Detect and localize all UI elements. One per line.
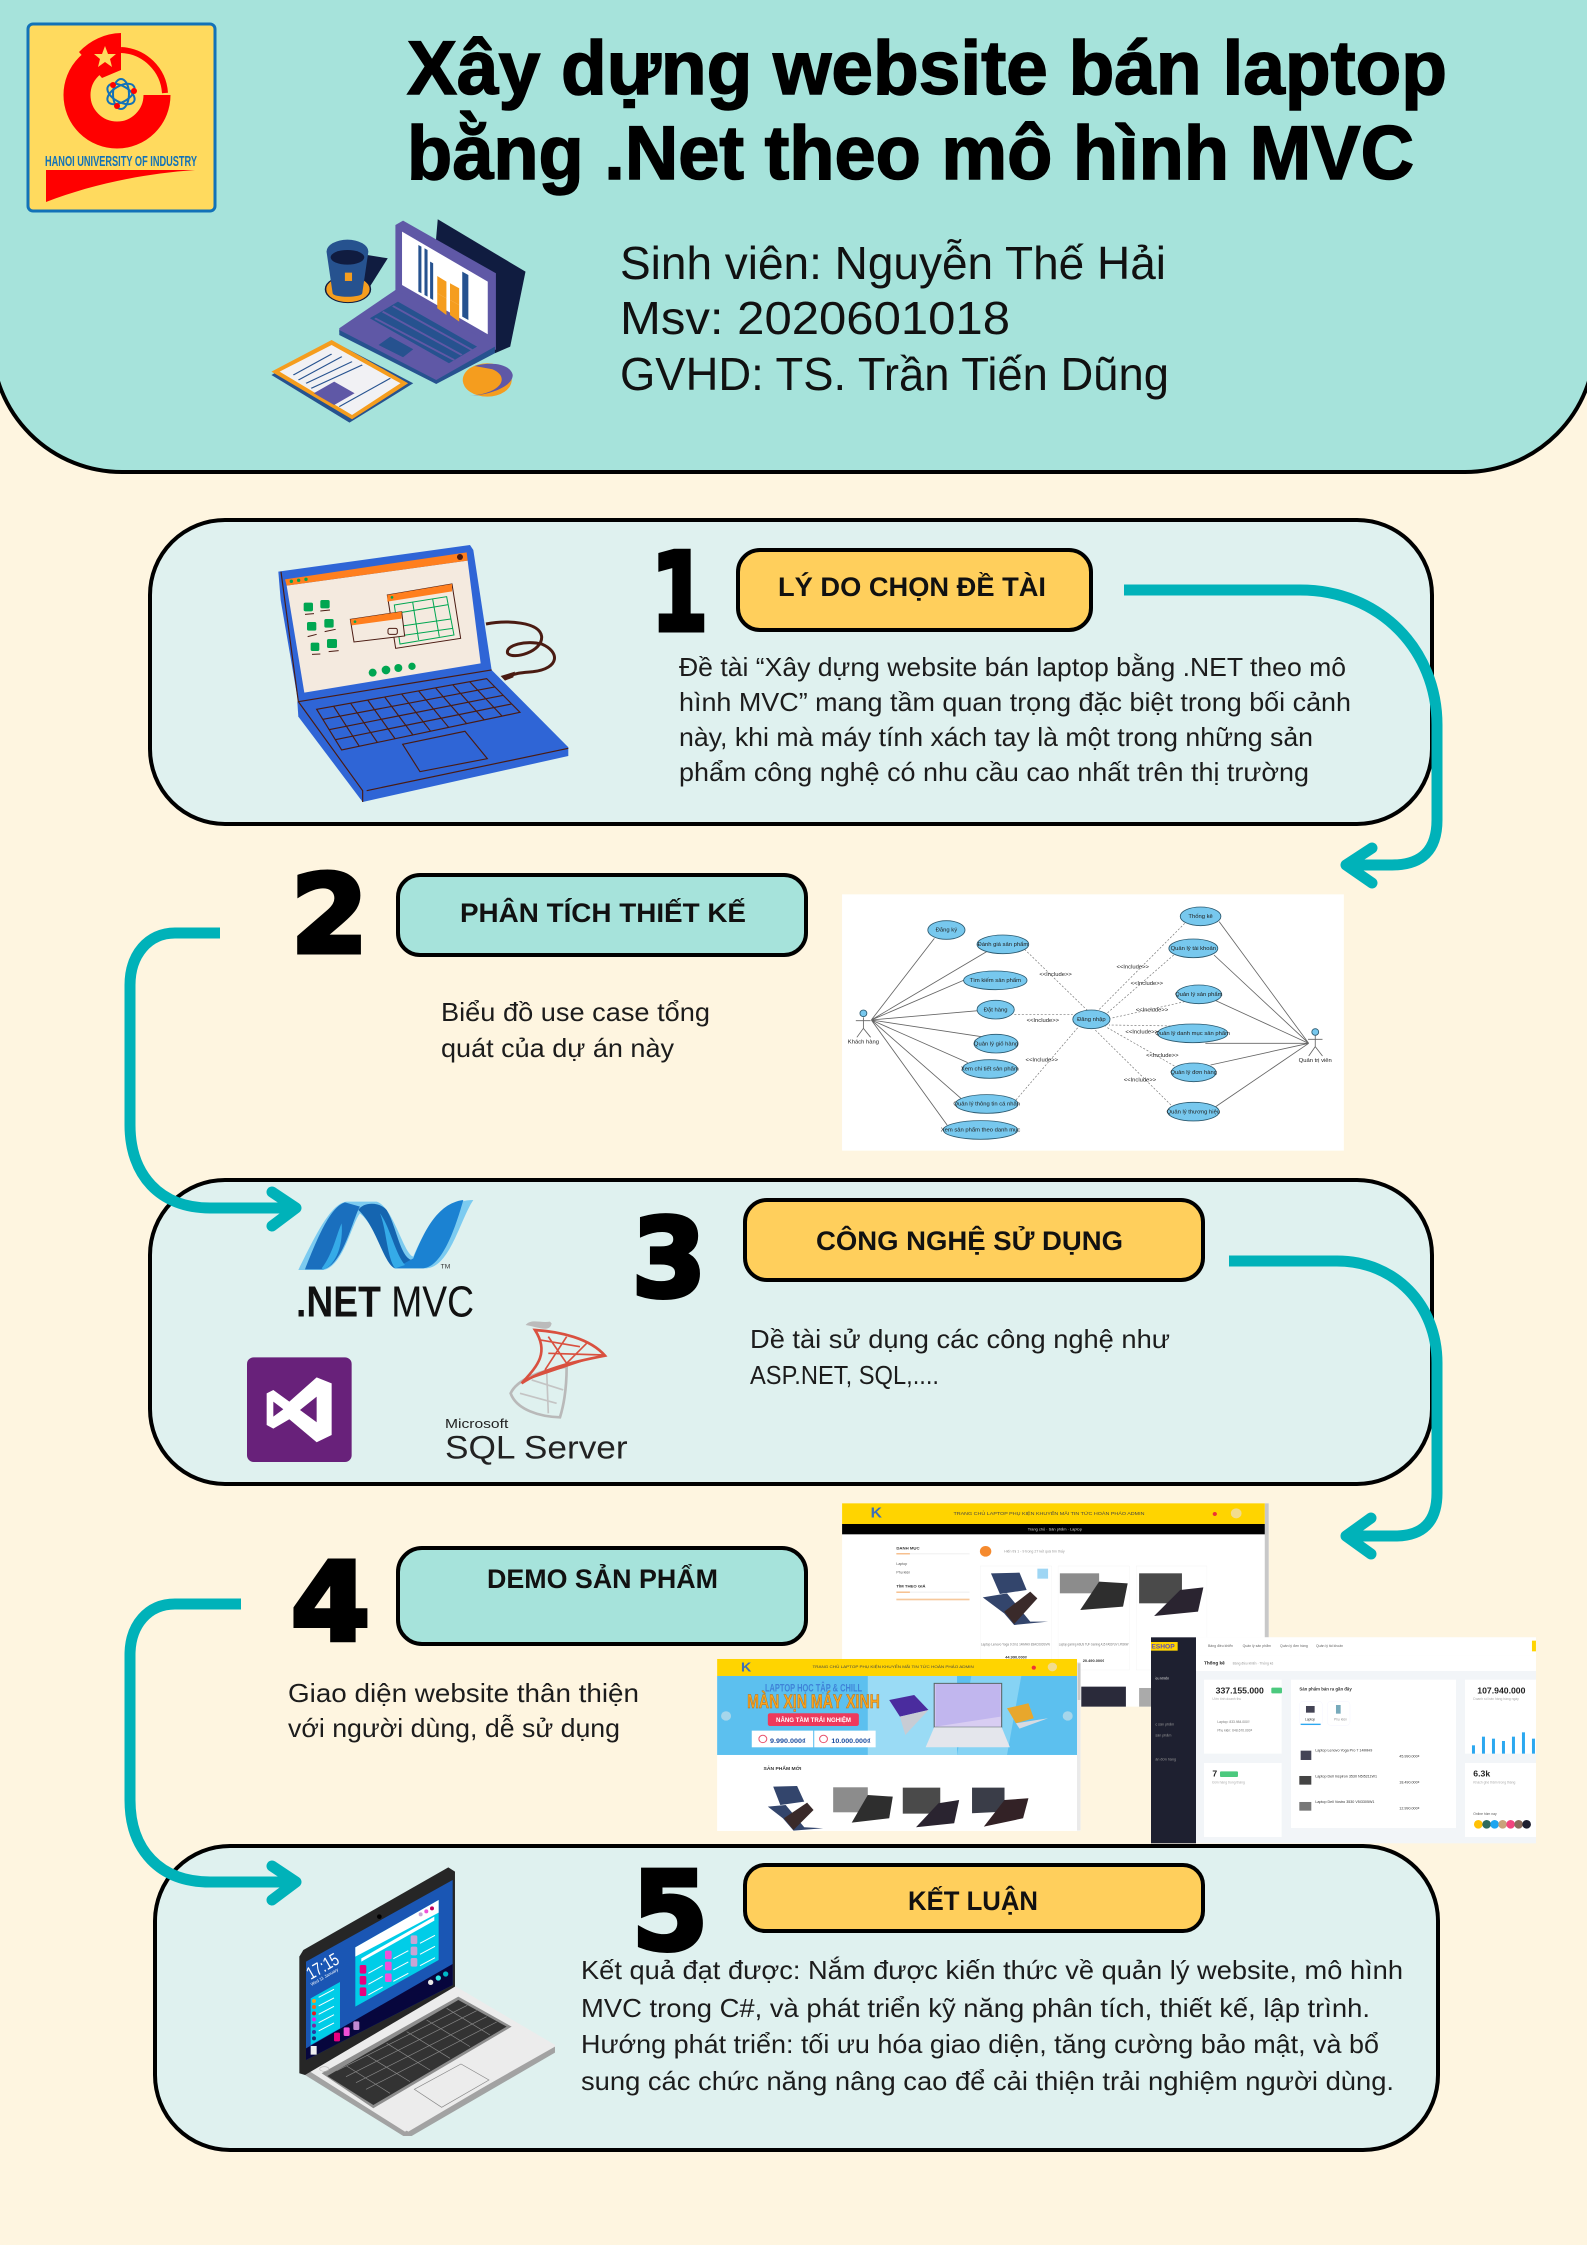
- screenshot: admin dashboard: Ước tính doanh thu: [1212, 1697, 1241, 1701]
- screenshot: admin dashboard: Phụ kiện: [1334, 1718, 1347, 1722]
- text: step 5 conclusion: Kết quả đạt được: Nắm được kiến thức về quản lý website, mô hình: [581, 1955, 1403, 1985]
- screenshot: product listing page: K: [871, 1505, 882, 1521]
- text: step 1 description: [679, 652, 1351, 787]
- screenshot: admin dashboard: [1151, 1637, 1536, 1843]
- chart: use case diagram: <<Include>>: [1026, 1058, 1059, 1064]
- screenshot: admin dashboard: 45.990.000₫: [1399, 1754, 1420, 1758]
- screenshot: admin dashboard: ESHOP: [1151, 1644, 1175, 1651]
- screenshot: product listing page: DANH MỤC: [896, 1546, 920, 1551]
- chart: use case diagram: Xem sản phẩm theo danh mục: [941, 1127, 1020, 1134]
- text: step 1 description: Đề tài “Xây dựng website bán laptop bằng .NET theo mô: [679, 652, 1346, 682]
- icon: isometric laptop, cup, tablet and mouse: [271, 219, 526, 423]
- text: step 2 description: [441, 997, 710, 1063]
- screenshot: homepage with banner: MÀN XỊN MÁY XINH: [747, 1691, 880, 1713]
- screenshot: homepage with banner: SẢN PHẨM MỚI: [764, 1764, 802, 1772]
- screenshot: product listing page: Laptop Lenovo Yoga 9 2in1 14IMH9 83AC000SVN: [981, 1643, 1050, 1647]
- badge: demo sản phẩm: [398, 1548, 806, 1644]
- panel: step 3 background: [150, 1180, 1432, 1484]
- text: step 5 conclusion: [581, 1955, 1403, 2096]
- chart: use case diagram: Thống kê: [1188, 914, 1213, 920]
- chart: use case diagram: Quản lý tài khoản: [1171, 946, 1216, 952]
- screenshot: homepage with banner: TRANG CHỦ LAPTOP PHỤ KIỆN KHUYẾN MÃI TIN TỨC HOÀN PHÁO ADMIN: [812, 1664, 974, 1669]
- icon: .NET MVC logo: TM: [441, 1264, 450, 1271]
- number 4: 4: [291, 1541, 370, 1666]
- icon: Visual Studio logo: [247, 1357, 352, 1462]
- screenshot: admin dashboard: Bảng điều khiển: [1208, 1644, 1233, 1648]
- icon: silver laptop with dashboard screen: 17:15: [303, 1950, 343, 1984]
- text: step 5 conclusion: sung các chức năng nâng cao để cải thiện trải nghiệm người dùng.: [581, 2066, 1394, 2096]
- chart: use case diagram: <<Include>>: [1146, 1053, 1179, 1059]
- chart: use case diagram: Khách hàng: [848, 1039, 879, 1045]
- screenshot: admin dashboard: Laptop: 833.984.000₫: [1217, 1720, 1250, 1724]
- chart: use case diagram: Đánh giá sản phẩm: [978, 941, 1028, 948]
- title: Xây dựng website bán laptop: [407, 26, 1447, 111]
- screenshot: admin dashboard: 107.940.000: [1477, 1685, 1526, 1695]
- screenshot: admin dashboard: Online hôm nay: [1473, 1812, 1497, 1816]
- text: step 3 description: [750, 1324, 1170, 1390]
- icon: Microsoft SQL Server logo: Microsoft: [445, 1416, 509, 1431]
- screenshot: admin dashboard: Laptop Dell Vostro 3530 V5I3305W1: [1315, 1800, 1374, 1804]
- icon: .NET MVC logo: .NET MVC: [296, 1279, 474, 1327]
- chart: use case diagram: Đăng ký: [936, 928, 957, 934]
- screenshot: product listing page: Laptop: [896, 1562, 907, 1566]
- student information: Msv: 2020601018: [620, 292, 1010, 344]
- badge: lý do chọn đề tài: LÝ DO CHỌN ĐỀ TÀI: [778, 571, 1046, 602]
- screenshot: admin dashboard: sản phẩm: [1155, 1734, 1171, 1738]
- screenshot: homepage with banner: [717, 1659, 1081, 1831]
- chart: use case diagram: Tìm kiếm sản phẩm: [970, 977, 1021, 984]
- screenshot: admin dashboard: 337.155.000: [1216, 1685, 1264, 1695]
- chart: use case diagram: Quản lý thương hiệu: [1167, 1109, 1220, 1115]
- text: step 2 description: Biểu đồ use case tổng: [441, 997, 710, 1027]
- screenshot: product listing page: 20.490.000₫: [1083, 1659, 1104, 1663]
- screenshot: admin dashboard: Quản lý đơn hàng: [1280, 1644, 1308, 1648]
- screenshot: homepage with banner: K: [741, 1659, 751, 1675]
- badge: kết luận: [745, 1865, 1203, 1931]
- screenshot: homepage with banner: LAPTOP HỌC TẬP & CHILL: [765, 1682, 862, 1694]
- screenshot: admin dashboard: Đơn hàng trong tháng: [1212, 1781, 1245, 1785]
- screenshot: admin dashboard: Phụ kiện: 648.670.000₫: [1217, 1729, 1253, 1733]
- chart: use case diagram: Quản lý đơn hàng: [1170, 1070, 1217, 1076]
- text: step 1 description: hình MVC” mang tầm quan trọng đặc biệt trong bối cảnh: [679, 687, 1351, 717]
- screenshot: admin dashboard: Doanh số bán hàng hàng ngày: [1473, 1697, 1519, 1701]
- text: step 2 description: quát của dự án này: [441, 1033, 674, 1063]
- arrow: step 2 to step 3: [130, 933, 296, 1226]
- screenshot: admin dashboard: Laptop Dell Inspiron 3530 N5I5211W1: [1315, 1774, 1377, 1778]
- chart: use case diagram: <<Include>>: [1124, 1077, 1157, 1083]
- screenshot: admin dashboard: Thống kê: [1204, 1660, 1225, 1666]
- icon: Microsoft SQL Server logo: SQL Server: [445, 1429, 628, 1465]
- arrow: step 4 to step 5: [130, 1604, 296, 1900]
- title: [407, 26, 1447, 196]
- chart: use case diagram: Quản trị viên: [1299, 1058, 1332, 1064]
- number 2: 2: [291, 853, 368, 978]
- logo: Hanoi University of Industry: [28, 24, 215, 211]
- chart: use case diagram: <<Include>>: [1116, 964, 1150, 970]
- arrow: step 3 to step 4: [1229, 1261, 1437, 1554]
- badge: phân tích thiết kế: PHÂN TÍCH THIẾT KẾ: [460, 897, 746, 928]
- student information: [620, 237, 1169, 400]
- screenshot: product listing page: 44.990.000₫: [1005, 1655, 1027, 1659]
- screenshot: admin dashboard: 6.3k: [1473, 1769, 1490, 1779]
- text: step 1 description: phẩm công nghệ có nhu cầu cao nhất trên thị trường: [679, 757, 1309, 787]
- icon: silver laptop with dashboard screen: [299, 1867, 555, 2136]
- screenshot: admin dashboard: c sản phẩm: [1155, 1723, 1174, 1727]
- chart: use case diagram: <<Include>>: [1027, 1018, 1060, 1024]
- screenshot: admin dashboard: ản đơn hàng: [1155, 1758, 1176, 1762]
- student information: GVHD: TS. Trần Tiến Dũng: [620, 348, 1169, 400]
- chart: use case diagram: Đăng nhập: [1077, 1017, 1106, 1023]
- number 5: 5: [632, 1850, 708, 1975]
- screenshot: homepage with banner: NÂNG TẦM TRẢI NGHIỆM: [776, 1714, 851, 1724]
- chart: use case diagram: Quản lý thông tin cá nhân: [953, 1102, 1020, 1108]
- chart: use case diagram: <<Include>>: [1125, 1029, 1159, 1035]
- chart: use case diagram: <<Include>>: [1039, 972, 1072, 978]
- badge: kết luận: KẾT LUẬN: [908, 1885, 1038, 1916]
- badge: lý do chọn đề tài: [738, 550, 1091, 630]
- text: step 5 conclusion: Hướng phát triển: tối ưu hóa giao diện, tăng cường bảo mật, và bổ: [581, 2029, 1379, 2059]
- title: bằng .Net theo mô hình MVC: [407, 111, 1414, 196]
- screenshot: admin dashboard: Bảng điều khiển · Thống kê: [1233, 1661, 1273, 1665]
- badge: phân tích thiết kế: [398, 875, 806, 955]
- icon: blue laptop with spreadsheet: [278, 545, 568, 802]
- screenshot: product listing page: Laptop gaming ASUS TUF Gaming A15 FA507UV LP090W: [1059, 1643, 1129, 1647]
- text: step 5 conclusion: MVC trong C#, và phát triển kỹ năng phân tích, thiết kế, lập trình.: [581, 1993, 1370, 2023]
- logo: Hanoi University of Industry: HANOI UNIVERSITY OF INDUSTRY: [45, 153, 197, 170]
- chart: use case diagram: Quản lý danh mục sản phẩm: [1155, 1030, 1230, 1037]
- badge: demo sản phẩm: DEMO SẢN PHẨM: [487, 1562, 718, 1594]
- screenshot: admin dashboard: ều khiển: [1155, 1676, 1169, 1680]
- text: step 4 description: Giao diện website thân thiện: [288, 1678, 639, 1708]
- screenshot: product listing page: [842, 1503, 1269, 1707]
- chart: use case diagram: Xem chi tiết sản phẩm: [961, 1066, 1019, 1073]
- text: step 1 description: này, khi mà máy tính xách tay là một trong những sản: [679, 722, 1313, 752]
- screenshot: product listing page: Hiển thị 1 - 9 trong 27 kết quả tìm thấy: [1004, 1550, 1065, 1554]
- text: step 4 description: với người dùng, dễ sử dụng: [288, 1713, 620, 1743]
- screenshot: admin dashboard: 7: [1212, 1769, 1217, 1779]
- screenshot: product listing page: TRANG CHỦ LAPTOP PHỤ KIỆN KHUYẾN MÃI TIN TỨC HOÀN PHÁO ADMIN: [953, 1509, 1144, 1516]
- chart: use case diagram: Quản lý sản phẩm: [1175, 991, 1223, 998]
- screenshot: product listing page: TÌM THEO GIÁ: [896, 1584, 926, 1589]
- panel: step 5 background: [155, 1846, 1438, 2150]
- chart: use case diagram: <<Include>>: [1136, 1008, 1169, 1014]
- text: step 4 description: [288, 1678, 639, 1743]
- screenshot: product listing page: Phụ kiện: [896, 1570, 910, 1574]
- chart: use case diagram: Quản lý giỏ hàng: [974, 1040, 1018, 1047]
- screenshot: admin dashboard: Quản lý sản phẩm: [1243, 1644, 1271, 1648]
- number 1: 1: [651, 531, 708, 656]
- icon: silver laptop with dashboard screen: Wed 11 January: [310, 1967, 340, 1987]
- icon: Microsoft SQL Server logo: [445, 1321, 628, 1465]
- screenshot: admin dashboard: 12.990.000₫: [1399, 1806, 1420, 1810]
- screenshot: product listing page: Trang chủ · Sản phẩm · Laptop: [1028, 1528, 1082, 1532]
- chart: use case diagram: [842, 894, 1344, 1151]
- chart: use case diagram: <<Include>>: [1131, 981, 1164, 987]
- screenshot: homepage with banner: 10.000.000₫: [831, 1738, 871, 1745]
- screenshot: admin dashboard: Laptop Lenovo Yoga Pro 7 14IMH9: [1315, 1748, 1372, 1752]
- screenshot: admin dashboard: Khách ghé thăm trong tháng: [1473, 1781, 1515, 1785]
- badge: công nghệ sử dụng: CÔNG NGHỆ SỬ DỤNG: [816, 1224, 1123, 1256]
- badge: công nghệ sử dụng: [745, 1200, 1203, 1280]
- number 3: 3: [632, 1197, 706, 1322]
- student information: Sinh viên: Nguyễn Thế Hải: [620, 237, 1166, 289]
- screenshot: admin dashboard: Quản lý tài khoản: [1316, 1644, 1343, 1648]
- text: step 3 description: Dề tài sử dụng các công nghệ như: [750, 1324, 1170, 1354]
- arrow: step 1 to step 2: [1124, 590, 1437, 883]
- panel: step 1 background: [150, 520, 1432, 824]
- text: step 3 description: ASP.NET, SQL,....: [750, 1360, 939, 1390]
- screenshot: admin dashboard: Sản phẩm bán ra gần đây: [1299, 1687, 1352, 1692]
- screenshot: admin dashboard: 18.490.000₫: [1399, 1780, 1420, 1784]
- header banner: [0, 0, 1587, 472]
- icon: .NET MVC logo: [296, 1200, 474, 1327]
- chart: use case diagram: Đặt hàng: [984, 1007, 1008, 1013]
- screenshot: homepage with banner: 9.990.000₫: [770, 1738, 806, 1745]
- screenshot: admin dashboard: Laptop: [1305, 1718, 1315, 1722]
